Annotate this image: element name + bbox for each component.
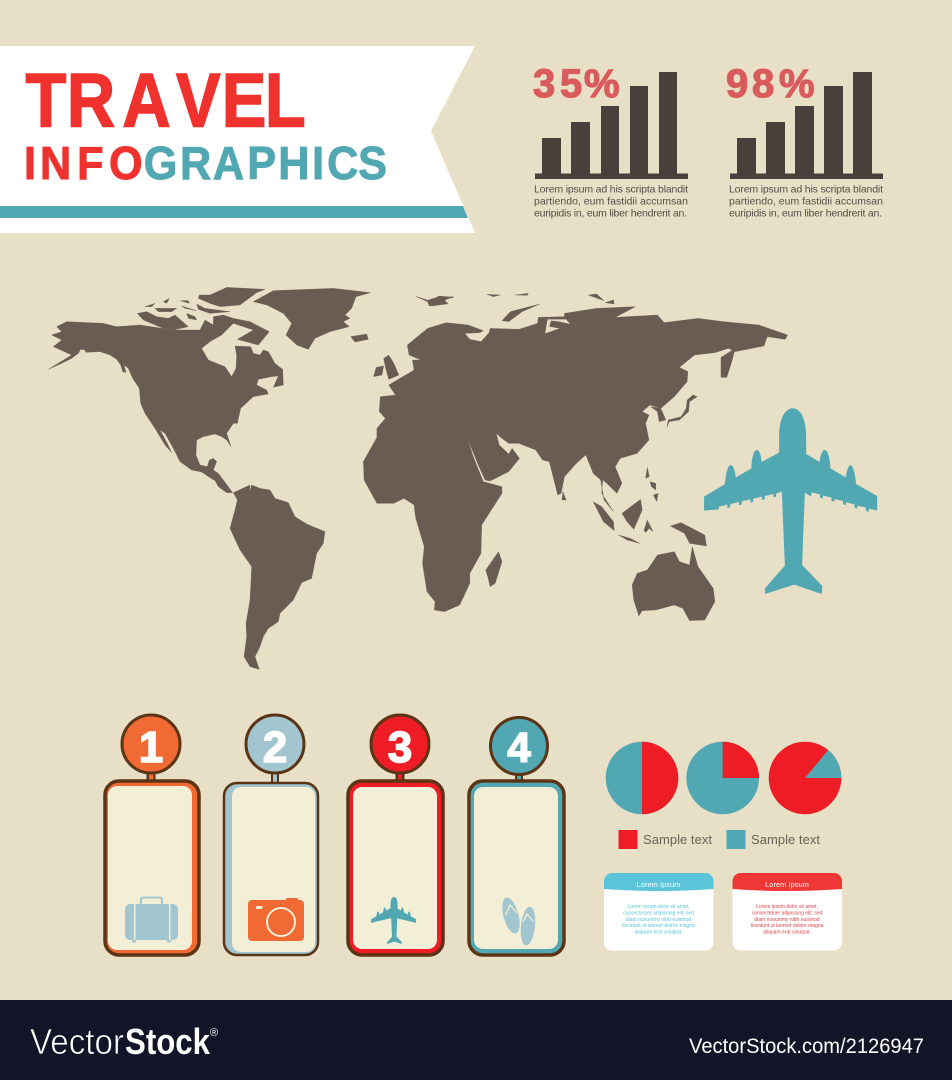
footer image id: VectorStock.com/2126947 xyxy=(689,1034,924,1058)
info card: blue: consectetuer adipiscing elit, sed xyxy=(623,910,694,916)
footer logo: Stock xyxy=(125,1021,211,1062)
caption text: euripidis in, eum liber hendrerit an. xyxy=(534,208,687,220)
icon: small airplane xyxy=(371,897,416,944)
number badge 3: 3 xyxy=(388,723,412,772)
info card: blue: diam nonummy nibh euismod xyxy=(626,917,691,923)
caption text xyxy=(534,184,688,220)
number badge 2 xyxy=(246,715,304,773)
stat: 35%: 35% xyxy=(533,62,620,106)
number badge 4: 4 xyxy=(507,724,531,771)
legend xyxy=(618,830,820,849)
caption text: Lorem ipsum ad his scripta blandit xyxy=(729,184,883,196)
number badge 1 xyxy=(122,715,180,773)
info card: red: Lorem Ipsum xyxy=(765,880,809,889)
eurasia, africa, oceania xyxy=(363,293,788,621)
footer logo xyxy=(30,1021,218,1062)
number badge 2: 2 xyxy=(263,723,287,772)
info card: red: consectetuer adipiscing elit, sed xyxy=(752,910,823,916)
info card: blue: Lorem Ipsum xyxy=(637,880,680,889)
world map xyxy=(48,287,788,669)
info card: blue: Lorem ipsum dolor sit amet, xyxy=(628,904,689,910)
panel: card 1 luggage xyxy=(105,715,199,955)
bar chart panel: 35% xyxy=(533,62,688,220)
footer bar xyxy=(0,1000,952,1080)
info card: red: tincidunt ut laoreet dolore magna xyxy=(751,923,824,929)
footer logo: ® xyxy=(210,1027,218,1039)
caption text: partiendo, eum fastidii accumsan xyxy=(534,196,688,208)
number badge 1: 1 xyxy=(139,723,163,772)
number badge 4 xyxy=(490,718,548,774)
number badge 3 xyxy=(371,715,429,773)
caption text: partiendo, eum fastidii accumsan xyxy=(729,196,883,208)
footer logo: Vector xyxy=(30,1021,124,1062)
info card: red: diam nonummy nibh euismod xyxy=(754,917,820,923)
title banner xyxy=(0,46,475,233)
pie chart 3 xyxy=(769,742,841,814)
panel: card 4 flip flops xyxy=(469,718,564,955)
info card: red: aliquam erat volutpat. xyxy=(763,930,811,936)
panel: card 3 airplane xyxy=(348,715,443,955)
icon: large airplane xyxy=(704,408,877,594)
title: travel: TRAVEL xyxy=(26,59,306,143)
info card: blue: aliquam erat volutpat. xyxy=(635,930,682,936)
bar chart panel: 98% xyxy=(726,62,883,220)
legend: Sample text xyxy=(643,832,712,847)
title: infographics: INFO xyxy=(24,139,143,189)
info card: blue xyxy=(604,873,714,950)
pie chart 1 xyxy=(606,742,678,814)
caption text: euripidis in, eum liber hendrerit an. xyxy=(729,208,882,220)
info card: blue: tincidunt ut laoreet dolore magna xyxy=(622,923,695,929)
legend: Sample text xyxy=(751,832,820,847)
info card: red: Lorem ipsum dolor sit amet, xyxy=(756,904,818,910)
icon: camera xyxy=(248,898,304,941)
icon: suitcase xyxy=(125,898,178,942)
info card: red xyxy=(732,873,842,950)
caption text xyxy=(729,184,883,220)
panel: card 2 camera xyxy=(224,715,318,955)
stat: 98%: 98% xyxy=(726,62,815,106)
pie chart 2 xyxy=(686,742,759,814)
icon: flip flops xyxy=(499,896,537,946)
americas, greenland, arctic islands xyxy=(48,287,453,669)
title: infographics: GRAPHICS xyxy=(144,139,387,189)
caption text: Lorem ipsum ad his scripta blandit xyxy=(534,184,688,196)
